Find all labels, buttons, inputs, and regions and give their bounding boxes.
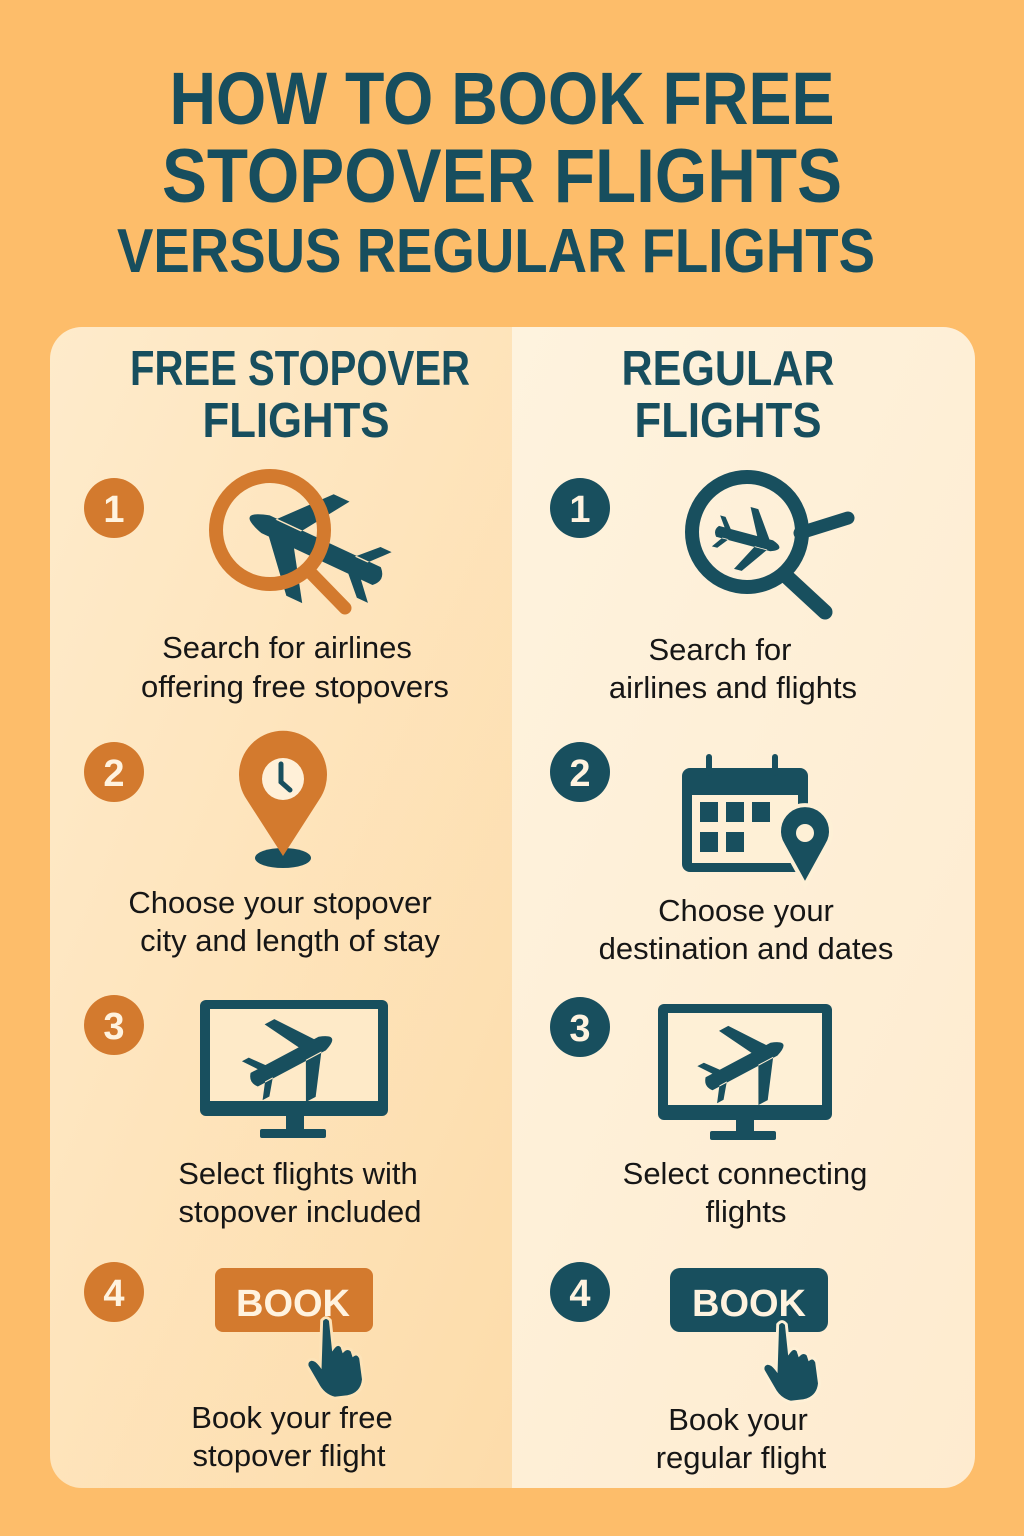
- step 3 right: [550, 997, 867, 1229]
- step 3 right: 3: [569, 1008, 591, 1050]
- title: VERSUS REGULAR FLIGHTS: [117, 217, 875, 286]
- step 1 left: 1: [103, 489, 125, 531]
- step 4 right: Book your: [668, 1402, 808, 1437]
- heading: regular flights: REGULAR: [622, 342, 834, 396]
- step 1 left: [84, 466, 449, 704]
- title: HOW TO BOOK FREE: [170, 57, 834, 140]
- step 3 left: 3: [103, 1006, 125, 1048]
- step 2 right: 2: [569, 753, 591, 795]
- step 4 left: BOOK: [236, 1283, 351, 1325]
- title: [117, 57, 875, 286]
- step 4 right: BOOK: [692, 1283, 807, 1325]
- step 3 left: Select flights with: [178, 1156, 418, 1191]
- step 4 left: [84, 1262, 393, 1473]
- heading: free stopover flights: [130, 342, 470, 448]
- step 2 right: destination and dates: [599, 931, 893, 966]
- step 4 right: [550, 1262, 828, 1475]
- heading: regular flights: [622, 342, 834, 448]
- step 2 left: city and length of stay: [140, 923, 440, 958]
- step 3 left: stopover included: [178, 1194, 422, 1229]
- heading: regular flights: FLIGHTS: [634, 394, 822, 448]
- step 4 right: 4: [569, 1273, 591, 1315]
- step 2 right: [550, 742, 893, 966]
- heading: free stopover flights: FREE STOPOVER: [130, 342, 470, 396]
- step 1 right: airlines and flights: [609, 670, 857, 705]
- step 2 left: [84, 731, 440, 958]
- step 4 left: stopover flight: [192, 1438, 386, 1473]
- step 3 right: flights: [706, 1194, 786, 1229]
- heading: free stopover flights: FLIGHTS: [202, 394, 390, 448]
- step 1 left: Search for airlines: [162, 630, 412, 665]
- step 3 left: [84, 995, 422, 1229]
- panel: comparison: [50, 327, 975, 1488]
- step 1 right: Search for: [648, 632, 792, 667]
- step 2 left: 2: [103, 753, 125, 795]
- step 4 left: Book your free: [191, 1400, 393, 1435]
- step 1 left: offering free stopovers: [141, 669, 449, 704]
- step 2 right: Choose your: [658, 893, 834, 928]
- step 1 right: 1: [569, 489, 591, 531]
- step 4 right: regular flight: [656, 1440, 827, 1475]
- step 3 right: Select connecting: [623, 1156, 867, 1191]
- step 2 left: Choose your stopover: [128, 885, 432, 920]
- title: STOPOVER FLIGHTS: [162, 134, 842, 219]
- step 1 right: [550, 477, 857, 705]
- step 4 left: 4: [103, 1273, 125, 1315]
